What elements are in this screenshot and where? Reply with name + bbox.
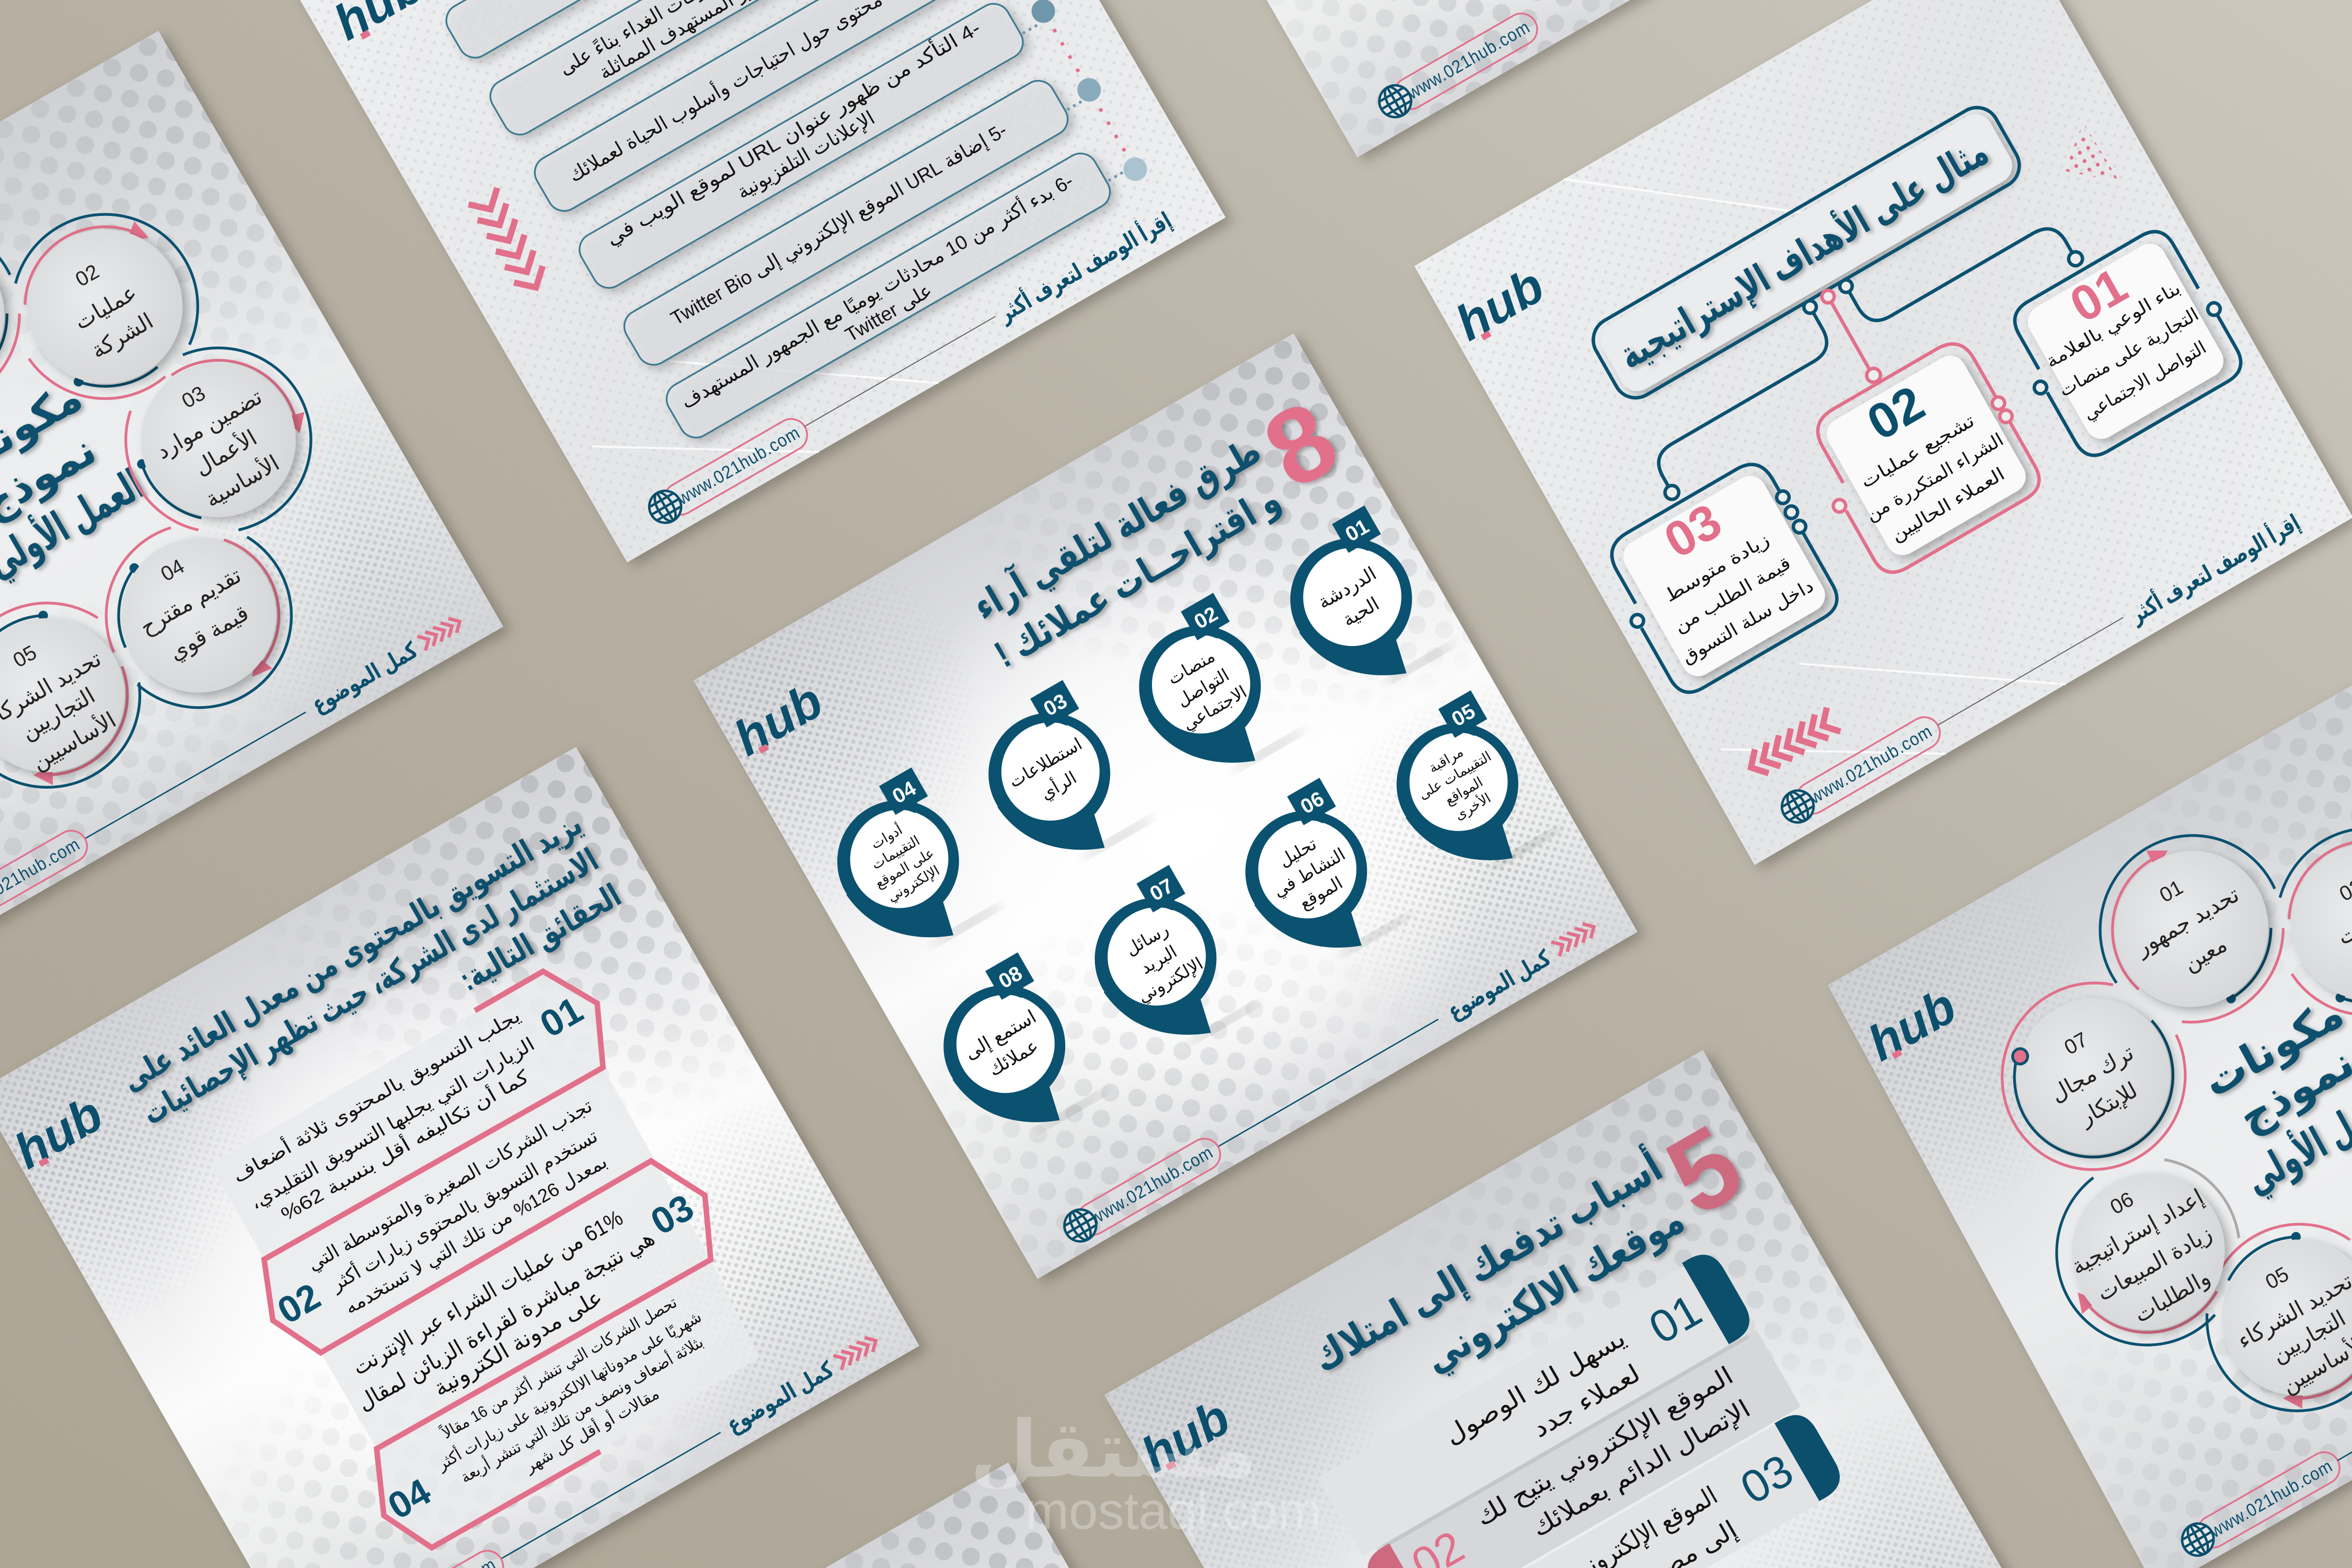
goal box 01: 01: [2061, 257, 2136, 333]
goal box 02: تشجيع عمليات: [1858, 411, 1978, 492]
stat 02: تجذب الشركات الصغيرة والمتوسطة التي: [304, 1095, 596, 1275]
footer: [643, 203, 1177, 529]
logo: hub: [5, 1086, 112, 1180]
pin 03: استطلاعات: [1006, 734, 1086, 792]
pin 07: [1065, 859, 1262, 1071]
row 02: [1358, 1330, 1801, 1568]
stat 04: تحصل الشركات التي تنشر أكثر من 16 مقالاً: [437, 1292, 680, 1443]
step 05: الأساسيين: [27, 706, 120, 775]
big number 8: 8: [1245, 378, 1356, 512]
pin 02: الاجتماعي: [1180, 682, 1250, 734]
stat 02: [262, 1095, 624, 1348]
list text: [462, 0, 1089, 434]
pin 03: 03: [1040, 689, 1071, 721]
step 02: الشركة: [87, 308, 158, 363]
footer: www.021hub.com: [674, 423, 804, 509]
stat 01: الزيارات التي يجلبها التسويق التقليدي،: [247, 1033, 538, 1214]
pin 02: [1110, 587, 1307, 799]
stat 04: شهريًا على مدوناتها الالكترونية على زيارات أكثر: [432, 1306, 705, 1474]
pin 02: 02: [1190, 602, 1222, 633]
panel: business model card right: [1828, 641, 2352, 1568]
title: الاستثمار لدى الشركة، حيث تظهر الإحصائيات: [136, 841, 605, 1132]
footer: إقرأ الوصف لتعرف أكثر: [993, 205, 1177, 328]
pin 05: مراقبة: [1426, 744, 1466, 776]
chevrons: [1744, 708, 1840, 779]
footer: [1058, 914, 1603, 1248]
pin 04: على الموقع: [872, 845, 937, 892]
title box: مثال على الأهداف الإستراتيجية: [1611, 128, 1996, 378]
step 05: [2070, 1084, 2352, 1551]
stat 01: 01: [533, 989, 590, 1046]
logo: hub: [1860, 978, 1965, 1072]
title box: [1585, 99, 2027, 406]
row 01: 01: [1641, 1285, 1710, 1354]
row 02: الموقع الإلكتروني يتيح لك: [1471, 1362, 1738, 1532]
goal box 02: [1783, 319, 2051, 585]
title: و اقتراحــات عملائك !: [988, 478, 1288, 676]
pin 06: 06: [1297, 787, 1328, 818]
pin 04: 04: [889, 777, 920, 808]
panel: partial card top centre (footer only): [1012, 0, 1963, 163]
footer: كمل الموضوع: [722, 1357, 838, 1438]
pin 05: المواقع: [1442, 774, 1486, 809]
step 01: [2019, 752, 2352, 1105]
pin 05: 05: [1448, 700, 1479, 731]
footer: كمل الموضوع: [1444, 945, 1555, 1025]
step 02: [2129, 677, 2352, 1167]
step 05: [0, 464, 280, 926]
pin 06: الموقع: [1296, 873, 1346, 913]
step 01: معين: [2180, 931, 2231, 976]
stat 01: يجلب التسويق بالمحتوى ثلاثة أضعاف: [228, 1003, 524, 1187]
pin 08: استمع إلى: [961, 1006, 1040, 1064]
panel: partial card bottom centre-left: [410, 1460, 1360, 1568]
footer: كمل الموضوع: [308, 638, 422, 718]
step 02: [0, 64, 349, 549]
list text: الإعلانات التلفزيونية: [733, 107, 879, 203]
step 02: عمليات: [70, 280, 141, 335]
step 03: 03: [178, 382, 209, 413]
step 01: 01: [2156, 875, 2187, 907]
stat 04: [366, 1284, 728, 1545]
title: الحقائق التالية:: [454, 877, 627, 998]
pin 08: 08: [995, 962, 1026, 993]
logo: hub: [725, 673, 832, 767]
list text: -5 إضافة URL الموقع الإلكتروني إلى Twitter Bio: [667, 119, 1011, 330]
step 04: 04: [157, 555, 188, 586]
title: يزيد التسويق بالمحتوى من معدل العائد على: [116, 805, 589, 1099]
pin 07: رسائل: [1122, 920, 1172, 960]
step 07: للإبتكار: [2075, 1077, 2142, 1131]
step 07: ترك مجال: [2047, 1040, 2138, 1107]
zigzag ribbon: [189, 956, 791, 1561]
pin 05: [1367, 685, 1564, 896]
timeline dots: [944, 0, 1151, 194]
step 06: [1974, 1073, 2323, 1431]
pin 07: 07: [1146, 874, 1178, 906]
pin 04: الإلكتروني: [885, 862, 942, 905]
dotted triangle: [2048, 121, 2119, 203]
stat 02: 02: [271, 1275, 327, 1332]
goal box 03: [1582, 436, 1850, 703]
watermark: مستقل: [970, 1405, 1256, 1493]
list text: -6 بدء أكثر من 10 محادثات يوميًا مع الجمهور المستهدف: [676, 168, 1077, 413]
step 07: 07: [2060, 1028, 2091, 1059]
title: مكونات: [2196, 988, 2351, 1108]
goal box 01: بناء الوعي بالعلامة: [2043, 278, 2184, 372]
footer: www.021hub.com: [2206, 1456, 2336, 1542]
pin 01: [1261, 500, 1458, 711]
stat 01: [228, 975, 601, 1237]
title: أسباب تدفعك إلى امتلاك: [1303, 1141, 1670, 1381]
pin 03: [959, 674, 1156, 886]
title: موقعك الالكتروني: [1417, 1197, 1692, 1382]
panel: 5 reasons website card: [1104, 1048, 2055, 1568]
goal box 01: التجارية على منصات: [2056, 304, 2202, 401]
stat 01: كما أن تكاليفه أقل بنسبة 62%: [276, 1064, 533, 1225]
stat 04: 04: [381, 1470, 438, 1528]
title: [2187, 984, 2352, 1205]
watermark: mostaql.com: [1025, 1482, 1321, 1540]
step 03: الأساسية: [200, 449, 283, 512]
step 04: تقديم مقترح: [136, 563, 246, 641]
pin 04: أدوات: [868, 821, 905, 852]
stat 03: هي نتيجة مباشرة لقراءة الزبائن لمقال: [353, 1225, 659, 1416]
step 04: [0, 389, 426, 841]
pin 01: 01: [1342, 515, 1373, 546]
pin 07: الإلكتروني: [1135, 954, 1206, 1007]
row 03: [1408, 1407, 1849, 1568]
goal box 01: [1986, 202, 2254, 468]
footer: [2176, 1320, 2352, 1562]
row 01: [1316, 1247, 1758, 1556]
pin 05: التقييمات على: [1416, 748, 1494, 802]
step 06: زيادة المبيعات: [2093, 1220, 2216, 1306]
step 05: التجاريين: [2268, 1306, 2350, 1368]
list text: على Twitter: [841, 279, 936, 346]
goal box 02: العملاء الحاليين: [1888, 464, 2009, 546]
goal box 03: زيادة متوسط: [1662, 529, 1773, 606]
text panels: [190, 957, 790, 1560]
panel: 8 ways feedback card: [694, 331, 1644, 1285]
title: [1303, 1141, 1698, 1431]
step 05: 05: [2262, 1262, 2292, 1294]
pin 02: التواصل: [1174, 665, 1232, 711]
stat 04: مقالات أو أقل كل شهر: [520, 1383, 663, 1477]
pin 01: الحية: [1339, 593, 1383, 630]
list boxes: [440, 0, 1116, 444]
step 04: قيمة قوي: [165, 601, 253, 665]
footer: [0, 609, 469, 940]
title: طرق فعالة لتلقي آراء: [965, 428, 1269, 629]
goal box 01: التواصل الاجتماعي: [2080, 338, 2210, 424]
chevrons: [468, 188, 550, 296]
logo: hub: [1133, 1390, 1239, 1483]
title: [0, 368, 153, 589]
panel: list steps card: [278, 0, 1233, 568]
step 02: 02: [72, 260, 103, 291]
pin 06: النشاط في: [1270, 845, 1348, 901]
stat 03: 61% من عمليات الشراء عبر الإنترنت: [348, 1205, 627, 1381]
step 07: [1963, 943, 2224, 1210]
step 06: إعداد إستراتيجية: [2067, 1184, 2208, 1280]
stat 03: [337, 1172, 713, 1438]
pin 08: [914, 947, 1111, 1158]
website pill: www.021hub.com: [1403, 17, 1534, 103]
stat 02: تستخدم التسويق بالمحتوى زيارات أكثر: [326, 1124, 602, 1296]
footer: www.021hub.com: [1806, 721, 1936, 808]
panel: strategic goals example card: [1414, 0, 2352, 871]
pin 06: تحليل: [1276, 834, 1320, 871]
goal box 02: 02: [1858, 375, 1933, 451]
pin 06: [1216, 772, 1413, 984]
step 01: [0, 140, 102, 490]
stat 02: بمعدل 126% من تلك التي لا تستخدمه: [341, 1151, 611, 1319]
pin 03: الرأي: [1036, 766, 1080, 804]
footer: [355, 1329, 885, 1568]
panel: business model card left: [0, 29, 510, 975]
row 02: الإتصال الدائم بعملائك: [1527, 1395, 1756, 1543]
pin 05: الأخرى: [1451, 789, 1494, 824]
big number 5: 5: [1647, 1101, 1762, 1239]
step 03: [13, 235, 424, 645]
pin 02: منصات: [1165, 647, 1218, 689]
stat 04: بثلاثة أضعاف ونصف من تلك التي تنشر أربعة: [456, 1331, 707, 1487]
footer: www.021hub.com: [1086, 1142, 1217, 1229]
row 03: 03: [1732, 1445, 1802, 1514]
title: [116, 805, 629, 1169]
row 01: لعملاء جدد: [1528, 1359, 1645, 1443]
pin 04: [808, 762, 1005, 974]
goal box 03: داخل سلة التسوق: [1678, 576, 1817, 668]
step 03: تضمين موارد: [152, 384, 267, 464]
goal box 02: الشراء المتكررة من: [1862, 430, 2007, 525]
stat 03: 03: [644, 1186, 700, 1243]
step 05: التجاريين: [17, 683, 99, 745]
step 05: 05: [9, 641, 41, 672]
step 06: والطلبات: [2130, 1264, 2215, 1328]
goal box 03: 03: [1655, 493, 1731, 569]
website pill: [1374, 7, 1543, 123]
step 06: 06: [2106, 1187, 2137, 1219]
stat 03: على مدونة الكترونية: [429, 1285, 607, 1401]
logo: hub: [1447, 258, 1553, 352]
pin 04: التقييمات: [869, 833, 923, 872]
goal box 03: قيمة الطلب من: [1670, 553, 1794, 637]
list text: -4 التأكد من ظهور عنوان URL لموقع الويب في: [601, 15, 985, 250]
step 03: الأعمال: [189, 424, 261, 480]
pin 08: عملائك: [985, 1035, 1042, 1080]
pin 01: الدردشة: [1315, 563, 1380, 614]
connectors: [1624, 174, 2073, 488]
step 01: تحديد جمهور: [2131, 882, 2243, 962]
panel: content marketing statistics card: [0, 745, 926, 1568]
pin 07: البريد: [1137, 942, 1180, 978]
footer: [1776, 503, 2304, 829]
watermark: [970, 1405, 1321, 1540]
row 01: يسهل لك الوصول: [1440, 1324, 1631, 1450]
